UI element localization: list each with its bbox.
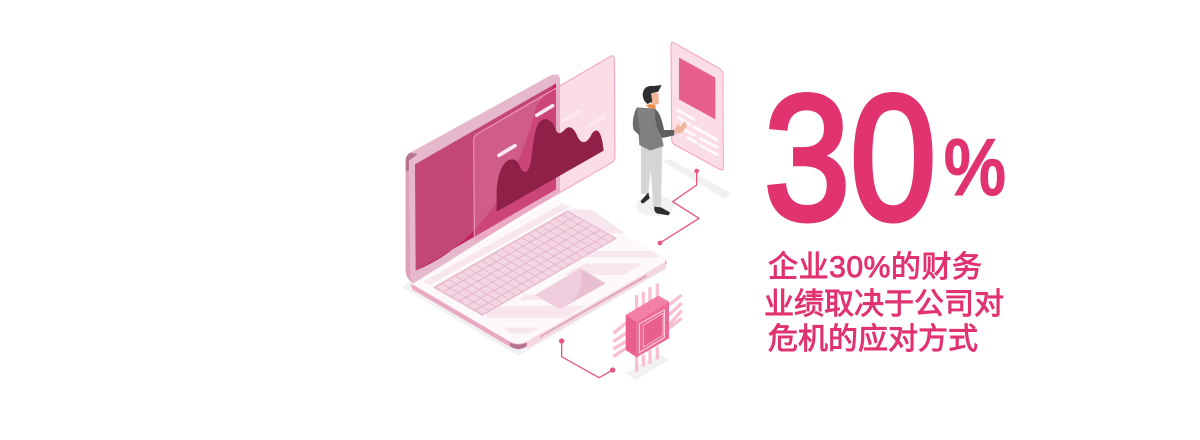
- chip body: [626, 296, 669, 357]
- base reflection stripes: [423, 204, 660, 333]
- connector: person to card: [658, 169, 699, 245]
- chip leads: [613, 283, 682, 372]
- laptop screen: [415, 83, 556, 271]
- percent sign: %: [944, 123, 1006, 211]
- laptop lid: [406, 74, 560, 283]
- chart labels: [499, 106, 604, 155]
- illustration: screen and floating panels: [406, 42, 731, 283]
- person: [633, 85, 687, 216]
- description text: [764, 251, 1004, 356]
- description text: 业绩取决于公司对: [764, 288, 1004, 321]
- big number 30: 30: [764, 59, 936, 257]
- floating document card: [671, 42, 723, 170]
- description text: 危机的应对方式: [768, 323, 978, 356]
- keyboard: [434, 211, 616, 315]
- touchpad: [535, 268, 606, 309]
- illustration: chip: [559, 283, 682, 380]
- area chart: [497, 119, 604, 212]
- card shadow: [663, 159, 731, 199]
- chip shadow: [626, 354, 669, 380]
- translucent chart panel: [474, 56, 615, 240]
- laptop body: [411, 200, 667, 349]
- illustration: laptop base: [402, 200, 667, 356]
- connector: laptop to chip: [559, 338, 615, 378]
- laptop shadow: [402, 258, 667, 356]
- description text: 企业30%的财务: [768, 251, 982, 284]
